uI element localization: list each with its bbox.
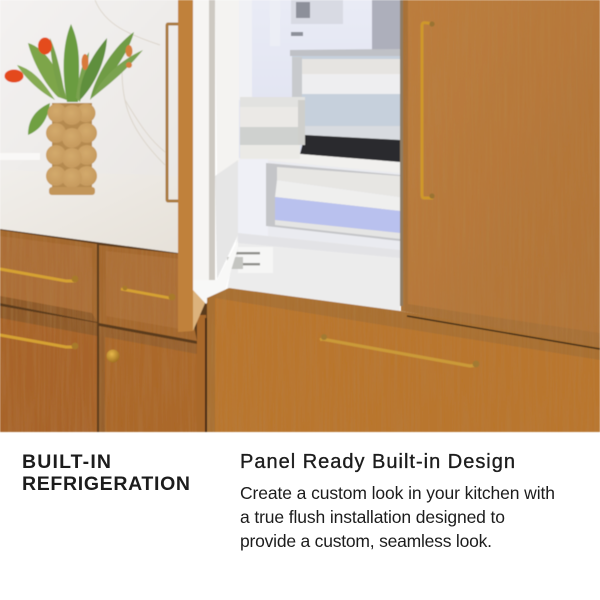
section label: built-in refrigeration: REFRIGERATION (22, 473, 190, 495)
handle: lower panel pull (320, 334, 479, 367)
door: lower left (0, 306, 97, 432)
upper glass shelf (290, 49, 400, 58)
product label (270, 0, 343, 46)
refrigerator interior (227, 0, 401, 312)
handle: cabinet door pull (167, 24, 178, 201)
marble backsplash (0, 0, 180, 200)
body text (240, 483, 555, 551)
vase body (46, 103, 97, 195)
lower drawer (266, 163, 400, 241)
knob: lower right door (106, 350, 120, 362)
door: lower right (99, 326, 197, 432)
tulip blooms (4, 38, 132, 82)
side wall (238, 0, 252, 100)
body text: provide a custom, seamless look. (240, 531, 492, 551)
marble countertop (0, 170, 178, 254)
wall cabinet door edge with handle (167, 0, 206, 332)
door bin (240, 97, 305, 159)
heading: panel ready built-in design: Panel Ready Built-in Design (240, 451, 515, 473)
handle: panel pull (422, 21, 435, 199)
lower left cabinets (0, 229, 207, 432)
handle: upper left drawer (0, 269, 78, 282)
back wall (238, 0, 401, 165)
leaves (17, 24, 143, 135)
dark rear corner (372, 0, 401, 50)
handle: upper right drawer (121, 286, 175, 300)
hinge (227, 247, 273, 273)
handle: lower left door (0, 335, 78, 349)
drawer: upper left (0, 230, 97, 322)
body text: a true flush installation designed to (240, 507, 505, 527)
lower back wall (238, 158, 401, 250)
open refrigerator door (193, 0, 239, 304)
white shelf front (240, 154, 400, 173)
lower refrigerator panel (205, 288, 600, 432)
drawer: upper right (99, 245, 197, 341)
section label: built-in refrigeration: BUILT-IN (22, 451, 111, 473)
upper drawer (292, 56, 400, 142)
lower compartment face (227, 233, 400, 312)
section label: built-in refrigeration (22, 451, 190, 495)
photo: kitchen with panel ready refrigerator (0, 0, 600, 432)
upper right cabinet panel (400, 0, 600, 349)
body text: Create a custom look in your kitchen with (240, 483, 555, 503)
cabinet stile (197, 315, 206, 432)
lower wall (238, 158, 268, 240)
dark shelf (300, 135, 400, 163)
vase with tulips (4, 24, 143, 195)
